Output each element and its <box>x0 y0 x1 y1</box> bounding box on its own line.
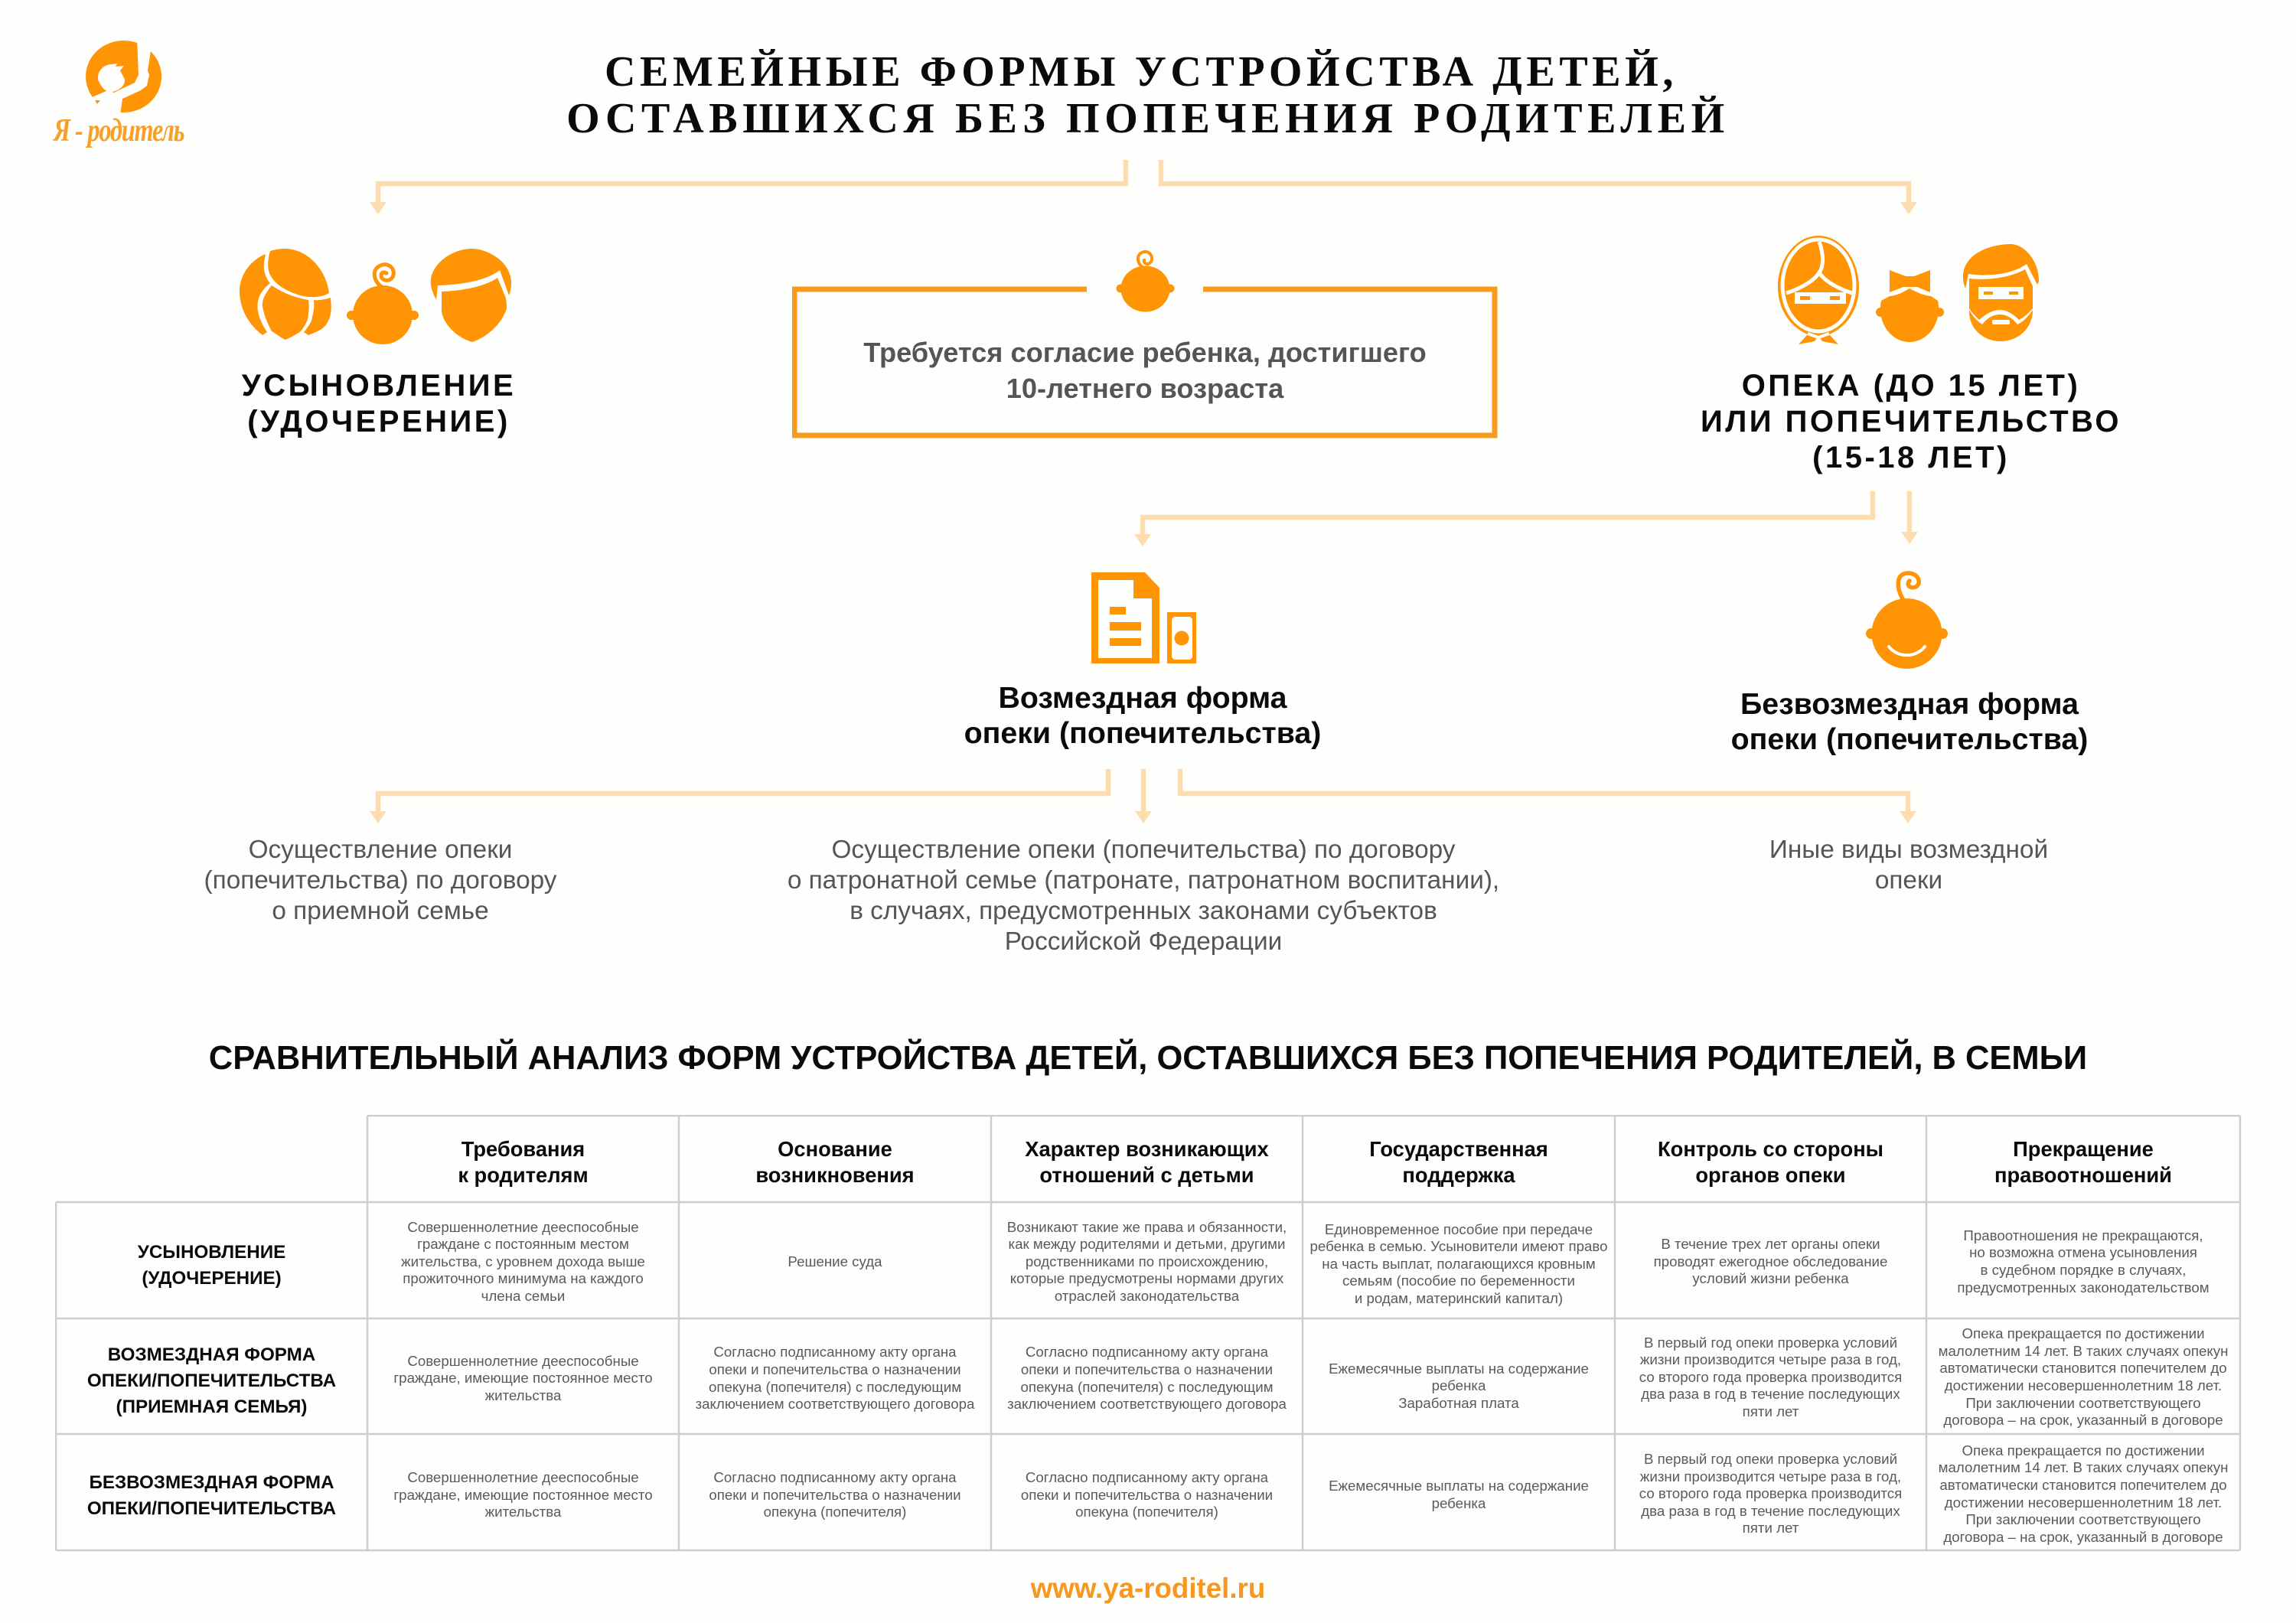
table row: free guardianship: ОПЕКИ/ПОПЕЧИТЕЛЬСТВА <box>87 1498 336 1519</box>
text: patronage: Российской Федерации <box>1005 927 1282 956</box>
table row: free guardianship: БЕЗВОЗМЕЗДНАЯ ФОРМА <box>89 1472 334 1493</box>
table header row: правоотношений <box>1994 1163 2172 1186</box>
table row: paid guardianship: опеки и попечительства о назначении <box>709 1361 961 1377</box>
heading: guardianship <box>1701 369 2122 474</box>
table row: paid guardianship: опекуна (попечителя) с последующим <box>1020 1379 1274 1394</box>
heading: free guardianship: опеки (попечительства) <box>1731 722 2088 756</box>
table header row: к родителям <box>458 1163 589 1186</box>
table row: paid guardianship: Согласно подписанному акту органа <box>713 1344 957 1360</box>
text: other forms: опеки <box>1875 866 1942 895</box>
table row: paid guardianship: Опека прекращается по достижении <box>1962 1325 2205 1341</box>
table row: paid guardianship: Совершеннолетние дееспособные <box>407 1353 639 1369</box>
table row: free guardianship: опеки и попечительства о назначении <box>1021 1487 1273 1503</box>
table row: paid guardianship: договора – на срок, указанный в договоре <box>1943 1412 2223 1428</box>
table row: adoption: Возникают такие же права и обязанности, <box>1007 1219 1287 1235</box>
table row: free guardianship: опеки и попечительства о назначении <box>709 1487 961 1503</box>
table row: adoption: члена семьи <box>481 1288 565 1304</box>
table row: adoption: семьям (пособие по беременности <box>1342 1273 1575 1289</box>
table row: adoption: проводят ежегодное обследование <box>1654 1253 1887 1269</box>
table row: adoption: как между родителями и детьми, другими <box>1009 1236 1285 1252</box>
table row: paid guardianship: автоматически становится попечителем до <box>1939 1360 2227 1376</box>
logo: Я-родитель: Я - родитель <box>54 113 184 148</box>
table row: free guardianship: два раза в год в течение последующих <box>1641 1503 1900 1519</box>
table row: adoption: на часть выплат, полагающихся кровным <box>1322 1256 1596 1272</box>
heading: paid guardianship <box>964 681 1321 750</box>
table row: free guardianship: достижении несовершеннолетним 18 лет. <box>1945 1494 2222 1511</box>
callout: consent of the child <box>792 249 1497 438</box>
table row: adoption: предусмотренных законодательством <box>1957 1279 2210 1295</box>
table row: paid guardianship: Согласно подписанному акту органа <box>1026 1344 1268 1360</box>
website url: www.ya-roditel.ru <box>1031 1572 1265 1604</box>
table row: free guardianship: со второго года проверка производится <box>1639 1485 1902 1501</box>
title: ОСТАВШИХСЯ БЕЗ ПОПЕЧЕНИЯ РОДИТЕЛЕЙ <box>566 95 1730 142</box>
table row: free guardianship: Ежемесячные выплаты на содержание <box>1329 1478 1589 1494</box>
table row: adoption <box>138 1219 2210 1306</box>
table header row: отношений с детьми <box>1039 1163 1254 1186</box>
text: foster family: Осуществление опеки <box>249 836 512 864</box>
title: СЕМЕЙНЫЕ ФОРМЫ УСТРОЙСТВА ДЕТЕЙ, <box>605 48 1678 96</box>
table row: paid guardianship: Ежемесячные выплаты на содержание <box>1329 1361 1589 1377</box>
heading: adoption: УСЫНОВЛЕНИЕ <box>242 369 516 402</box>
text: patronage <box>788 836 1499 956</box>
table row: adoption: жительства, с уровнем дохода выше <box>401 1253 645 1269</box>
table row: free guardianship: пяти лет <box>1743 1520 1799 1536</box>
table row: adoption: условий жизни ребенка <box>1692 1270 1849 1286</box>
table row: paid guardianship: заключением соответствующего договора <box>1007 1396 1287 1412</box>
text: other forms <box>1769 836 2048 895</box>
text: other forms: Иные виды возмездной <box>1769 836 2048 864</box>
table header row: Основание <box>778 1137 892 1161</box>
table row: adoption: В течение трех лет органы опеки <box>1661 1236 1880 1252</box>
table row: free guardianship: граждане, имеющие постоянное место <box>393 1487 653 1503</box>
table row: paid guardianship: малолетним 14 лет. В таких случаях опекун <box>1939 1343 2228 1359</box>
heading: paid guardianship: Возмездная форма <box>998 681 1287 715</box>
text: foster family: (попечительства) по договору <box>204 866 556 895</box>
table row: free guardianship: В первый год опеки проверка условий <box>1644 1451 1897 1467</box>
table row: adoption: ребенка в семью. Усыновители имеют право <box>1310 1238 1607 1254</box>
table header row: Характер возникающих <box>1025 1137 1269 1161</box>
table row: free guardianship: При заключении соответствующего <box>1965 1511 2201 1527</box>
heading: free guardianship <box>1731 687 2088 756</box>
table row: paid guardianship: опеки и попечительства о назначении <box>1021 1361 1273 1377</box>
table header row: Государственная <box>1369 1137 1548 1161</box>
heading: guardianship: ОПЕКА (ДО 15 ЛЕТ) <box>1742 369 2080 402</box>
logo: Я-родитель <box>53 41 184 148</box>
table row: paid guardianship: Заработная плата <box>1398 1395 1519 1411</box>
table row: free guardianship: жительства <box>485 1504 561 1520</box>
table row: paid guardianship: достижении несовершеннолетним 18 лет. <box>1945 1377 2222 1393</box>
table row: adoption: в судебном порядке в случаях, <box>1981 1262 2186 1278</box>
table row: free guardianship: Согласно подписанному акту органа <box>713 1469 957 1485</box>
table row: adoption: Совершеннолетние дееспособные <box>407 1219 639 1235</box>
heading: free guardianship: Безвозмездная форма <box>1740 687 2079 721</box>
table row: adoption: граждане с постоянным местом <box>417 1236 629 1252</box>
table row: free guardianship: ребенка <box>1432 1495 1486 1511</box>
table row: paid guardianship: пяти лет <box>1743 1403 1799 1419</box>
heading: adoption: (УДОЧЕРЕНИЕ) <box>247 405 510 438</box>
table row: paid guardianship: опекуна (попечителя) с последующим <box>709 1379 961 1394</box>
table row: paid guardianship: жительства <box>485 1387 561 1403</box>
heading: guardianship: (15-18 ЛЕТ) <box>1812 441 2010 474</box>
table row: paid guardianship: При заключении соответствующего <box>1965 1395 2201 1411</box>
text: foster family: о приемной семье <box>272 897 489 925</box>
table row: adoption: родственниками по происхождению, <box>1026 1253 1268 1269</box>
table row: free guardianship: Совершеннолетние дееспособные <box>407 1469 639 1485</box>
table header row: Прекращение <box>2013 1137 2154 1161</box>
table row: adoption: которые предусмотрены нормами других <box>1010 1270 1283 1286</box>
text: patronage: о патронатной семье (патронате, патронатном воспитании), <box>788 866 1499 895</box>
text: patronage: Осуществление опеки (попечительства) по договору <box>831 836 1455 864</box>
table row: paid guardianship: граждане, имеющие постоянное место <box>393 1370 653 1386</box>
table row: free guardianship: Согласно подписанному акту органа <box>1026 1469 1268 1485</box>
callout: consent of the child: 10-летнего возраста <box>1006 373 1283 404</box>
table row: free guardianship: опекуна (попечителя) <box>764 1504 906 1520</box>
table row: free guardianship: малолетним 14 лет. В таких случаях опекун <box>1939 1459 2228 1475</box>
table header row <box>458 1137 2172 1187</box>
table row: paid guardianship <box>87 1325 2228 1428</box>
text: patronage: в случаях, предусмотренных законами субъектов <box>850 897 1437 925</box>
table row: adoption: и родам, материнский капитал) <box>1355 1290 1563 1306</box>
table row: paid guardianship: (ПРИЕМНАЯ СЕМЬЯ) <box>116 1396 307 1417</box>
table row: free guardianship <box>87 1442 2228 1545</box>
table row: paid guardianship: два раза в год в течение последующих <box>1641 1386 1900 1402</box>
heading: adoption <box>242 369 516 438</box>
table row: adoption: но возможна отмена усыновления <box>1969 1244 2197 1260</box>
callout: consent of the child: Требуется согласие ребенка, достигшего <box>863 337 1427 368</box>
table header row: органов опеки <box>1695 1163 1846 1186</box>
table row: free guardianship: опекуна (попечителя) <box>1075 1504 1218 1520</box>
heading: comparative analysis: СРАВНИТЕЛЬНЫЙ АНАЛИЗ ФОРМ УСТРОЙСТВА ДЕТЕЙ, ОСТАВШИХСЯ БЕЗ ПОПЕЧЕНИЯ РОДИТЕЛЕЙ, В СЕМЬИ <box>209 1040 2087 1077</box>
table row: paid guardianship: ВОЗМЕЗДНАЯ ФОРМА <box>108 1344 315 1365</box>
comparison table <box>55 1115 2241 1552</box>
table header row: возникновения <box>755 1163 915 1186</box>
table row: adoption: (УДОЧЕРЕНИЕ) <box>142 1268 282 1289</box>
table row: adoption: прожиточного минимума на каждого <box>403 1270 644 1286</box>
table row: paid guardianship: жизни производится четыре раза в год, <box>1640 1351 1901 1367</box>
table row: free guardianship: жизни производится четыре раза в год, <box>1640 1468 1901 1484</box>
table row: free guardianship: договора – на срок, указанный в договоре <box>1943 1529 2223 1545</box>
table row: paid guardianship: ребенка <box>1432 1377 1486 1393</box>
icon: baby above callout <box>1116 252 1174 312</box>
table header row: Контроль со стороны <box>1658 1137 1883 1161</box>
table row: adoption: Решение суда <box>788 1253 882 1269</box>
heading: paid guardianship: опеки (попечительства) <box>964 716 1321 750</box>
table row: paid guardianship: заключением соответствующего договора <box>696 1396 974 1412</box>
text: foster family <box>204 836 557 925</box>
heading: guardianship: ИЛИ ПОПЕЧИТЕЛЬСТВО <box>1701 405 2122 438</box>
table row: adoption: УСЫНОВЛЕНИЕ <box>138 1242 285 1263</box>
table row: paid guardianship: В первый год опеки проверка условий <box>1644 1335 1897 1351</box>
table row: paid guardianship: ОПЕКИ/ПОПЕЧИТЕЛЬСТВА <box>87 1370 336 1391</box>
table row: adoption: отраслей законодательства <box>1055 1288 1239 1304</box>
table header row: поддержка <box>1402 1163 1515 1186</box>
table row: free guardianship: автоматически становится попечителем до <box>1939 1477 2227 1493</box>
table header row: Требования <box>461 1137 585 1161</box>
title <box>566 48 1730 142</box>
table row: free guardianship: Опека прекращается по достижении <box>1962 1442 2205 1458</box>
table row: adoption: Правоотношения не прекращаются, <box>1963 1227 2203 1243</box>
table row: paid guardianship: со второго года проверка производится <box>1639 1369 1902 1385</box>
table row: adoption: Единовременное пособие при передаче <box>1325 1221 1593 1237</box>
